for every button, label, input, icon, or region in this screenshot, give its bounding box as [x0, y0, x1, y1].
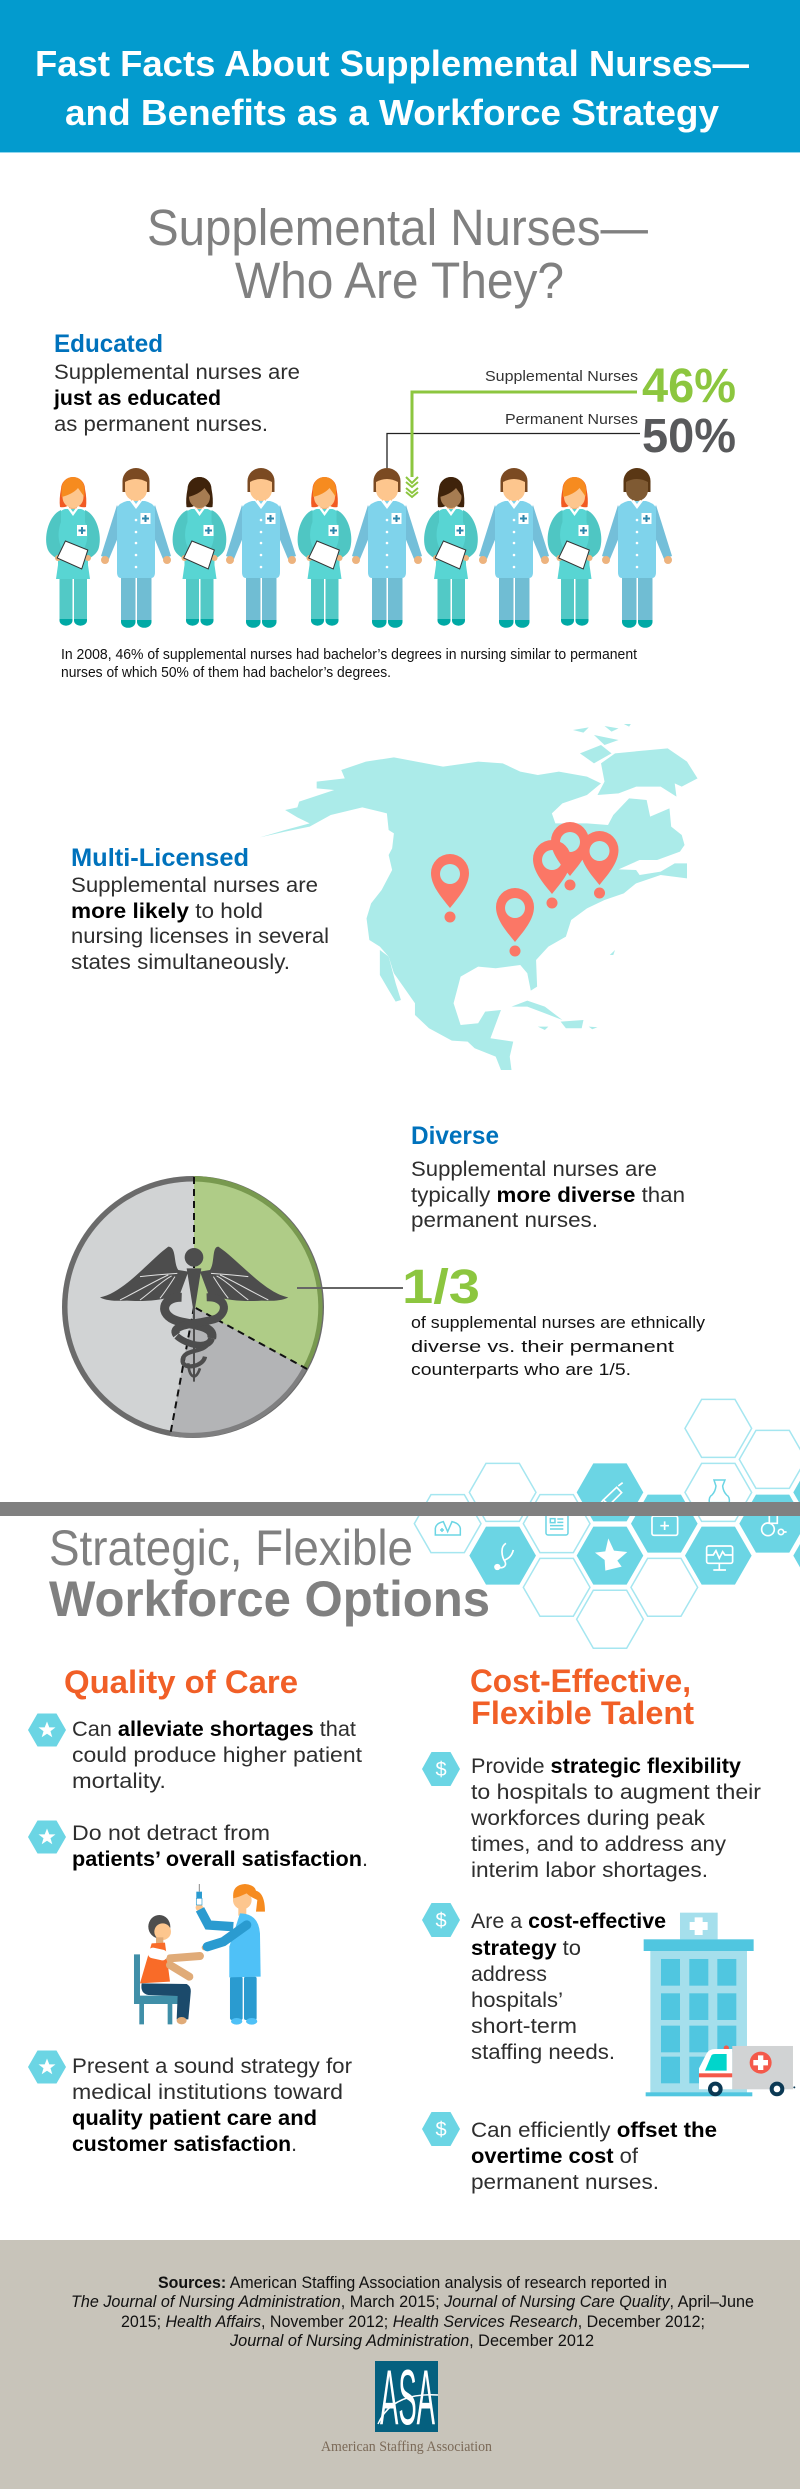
bullet: cost-effective strategy: Are a cost-effective — [471, 1910, 666, 1933]
header banner — [0, 0, 800, 153]
bullet: satisfaction: patients’ overall satisfaction . — [72, 1848, 368, 1871]
stat description: diverse vs. their permanent — [411, 1337, 674, 1356]
stat description: counterparts who are 1/5. — [411, 1360, 631, 1379]
bullet: offset overtime: permanent nurses. — [471, 2171, 659, 2194]
multi-licensed heading: Multi-Licensed — [71, 844, 249, 872]
bullet: strategic flexibility: times, and to address any — [471, 1833, 727, 1856]
bullet: offset overtime: $ — [435, 2119, 447, 2141]
bullet: strategic flexibility: $ — [435, 1759, 447, 1781]
title: and Benefits as a Workforce Strategy — [65, 92, 719, 133]
pie chart with caduceus — [62, 1176, 324, 1438]
icon: nurse — [709, 1480, 729, 1503]
bullet: alleviate shortages: Can alleviate shortages that — [72, 1718, 356, 1741]
panel: multi-licensed — [71, 724, 698, 1070]
bullet: sound strategy: medical institutions toward — [72, 2081, 343, 2104]
icon: medical plus — [652, 1516, 678, 1535]
connector: permanent — [387, 434, 640, 468]
map: north america — [260, 724, 698, 1070]
bullet: alleviate shortages: could produce higher patient — [72, 1744, 362, 1767]
icon: star — [595, 1538, 627, 1571]
cost-effective heading — [470, 1663, 694, 1731]
divider bar — [0, 1502, 800, 1516]
diverse text: Supplemental nurses are — [411, 1158, 657, 1181]
bullet: cost-effective strategy — [422, 1903, 666, 2064]
nurses row — [46, 468, 672, 628]
bullet: offset overtime — [422, 2112, 717, 2194]
bullet: cost-effective strategy: staffing needs. — [471, 2041, 615, 2064]
icon: document — [546, 1512, 568, 1535]
stat: permanent nurses 50%: 50% — [642, 410, 736, 463]
stat description — [411, 1313, 706, 1379]
bullet: strategic flexibility: workforces during peak — [470, 1807, 706, 1830]
educated footnote: nurses of which 50% of them had bachelor’s degrees. — [61, 665, 391, 681]
map pins — [431, 822, 618, 956]
bullet: alleviate shortages: mortality. — [72, 1770, 166, 1793]
multi-licensed text: states simultaneously. — [71, 951, 290, 974]
icon: stethoscope — [495, 1543, 513, 1569]
bullet: alleviate shortages — [28, 1714, 362, 1793]
icon: caduceus — [100, 1247, 288, 1382]
section heading: workforce options: Strategic, Flexible — [49, 1520, 413, 1576]
bullet: sound strategy: Present a sound strategy for — [72, 2055, 352, 2078]
title: Fast Facts About Supplemental Nurses— — [35, 43, 749, 84]
stat: permanent nurses 50% — [505, 410, 736, 463]
icon: heart monitor — [707, 1546, 733, 1570]
sources — [71, 2273, 754, 2350]
panel: cost-effective — [422, 1663, 795, 2194]
stat: supplemental nurses 46%: 46% — [642, 360, 736, 413]
multi-licensed text — [71, 874, 329, 974]
educated text — [53, 361, 300, 436]
educated footnote — [61, 647, 637, 681]
bullet: satisfaction — [28, 1820, 368, 1871]
diverse text: typically more diverse than — [411, 1184, 685, 1207]
educated footnote: In 2008, 46% of supplemental nurses had bachelor’s degrees in nursing similar to permanent — [61, 647, 637, 663]
ASA logo: American Staffing Association — [321, 2439, 493, 2455]
bullet: offset overtime: Can efficiently offset the — [471, 2119, 717, 2142]
sources: Journal of Nursing Administration, December 2012 — [229, 2331, 594, 2350]
bullet: strategic flexibility: Provide strategic flexibility — [471, 1755, 741, 1778]
icon: syringe — [600, 1483, 623, 1505]
bullet: sound strategy — [28, 2050, 352, 2156]
multi-licensed text: nursing licenses in several — [71, 925, 329, 948]
bullet: strategic flexibility: interim labor shortages. — [471, 1859, 708, 1882]
multi-licensed text: more likely to hold — [71, 900, 263, 923]
title — [35, 43, 749, 133]
stat: supplemental nurses 46%: Supplemental Nurses — [485, 368, 638, 385]
diverse text: permanent nurses. — [411, 1209, 598, 1232]
bullet: offset overtime: overtime cost of — [471, 2145, 638, 2168]
bullet: cost-effective strategy: strategy to — [471, 1937, 581, 1960]
educated heading: Educated — [54, 330, 163, 358]
section heading: who are they: Who Are They? — [235, 252, 564, 309]
bullet: sound strategy: customer satisfaction. — [72, 2133, 297, 2156]
ASA logo — [321, 2353, 493, 2455]
section heading: workforce options — [49, 1520, 490, 1627]
quality heading: Quality of Care — [64, 1664, 298, 1700]
stat: supplemental nurses 46% — [485, 360, 736, 413]
diverse text — [411, 1158, 685, 1232]
educated text: just as educated — [53, 387, 221, 410]
multi-licensed text: Supplemental nurses are — [71, 874, 318, 897]
illustration: hospital and ambulance — [644, 1913, 795, 2096]
icon: wheelchair — [762, 1513, 787, 1536]
bullet: cost-effective strategy: $ — [435, 1910, 447, 1932]
stat description: of supplemental nurses are ethnically — [411, 1313, 706, 1332]
stat: one third: 1/3 — [402, 1261, 480, 1314]
panel: educated — [46, 330, 736, 681]
panel: quality of care — [28, 1664, 368, 2156]
illustration: nurse and patient — [134, 1884, 265, 2025]
sources: Sources: American Staffing Association analysis of research reported in — [158, 2273, 667, 2292]
bullet: strategic flexibility: to hospitals to augment their — [471, 1781, 761, 1804]
bullet: strategic flexibility — [422, 1752, 761, 1882]
connector line — [297, 1287, 403, 1289]
cost-effective heading: Cost-Effective, — [470, 1663, 691, 1699]
footer panel — [0, 2240, 800, 2489]
panel: diverse — [62, 1122, 706, 1438]
sources: The Journal of Nursing Administration, March 2015; Journal of Nursing Care Quality, April–June — [71, 2292, 754, 2311]
icon: doctor — [435, 1522, 460, 1535]
educated text: as permanent nurses. — [54, 413, 268, 436]
sources: 2015; Health Affairs, November 2012; Health Services Research, December 2012; — [121, 2312, 705, 2331]
cost-effective heading: Flexible Talent — [471, 1695, 694, 1731]
bullet: cost-effective strategy: hospitals’ — [471, 1989, 563, 2012]
section heading: workforce options: Workforce Options — [49, 1571, 490, 1627]
section heading: who are they — [147, 199, 648, 309]
bullet: cost-effective strategy: address — [471, 1963, 547, 1986]
ASA logo: ASA — [380, 2353, 435, 2441]
arrow: supplemental — [406, 392, 637, 497]
bullet: cost-effective strategy: short-term — [471, 2015, 577, 2038]
hexagon icon cluster — [414, 1399, 800, 1648]
section heading: who are they: Supplemental Nurses— — [147, 199, 648, 256]
stat: permanent nurses 50%: Permanent Nurses — [505, 411, 638, 428]
diverse heading: Diverse — [411, 1122, 499, 1150]
bullet: sound strategy: quality patient care and — [72, 2107, 317, 2130]
bullet: satisfaction: Do not detract from — [72, 1822, 270, 1845]
educated text: Supplemental nurses are — [54, 361, 300, 384]
